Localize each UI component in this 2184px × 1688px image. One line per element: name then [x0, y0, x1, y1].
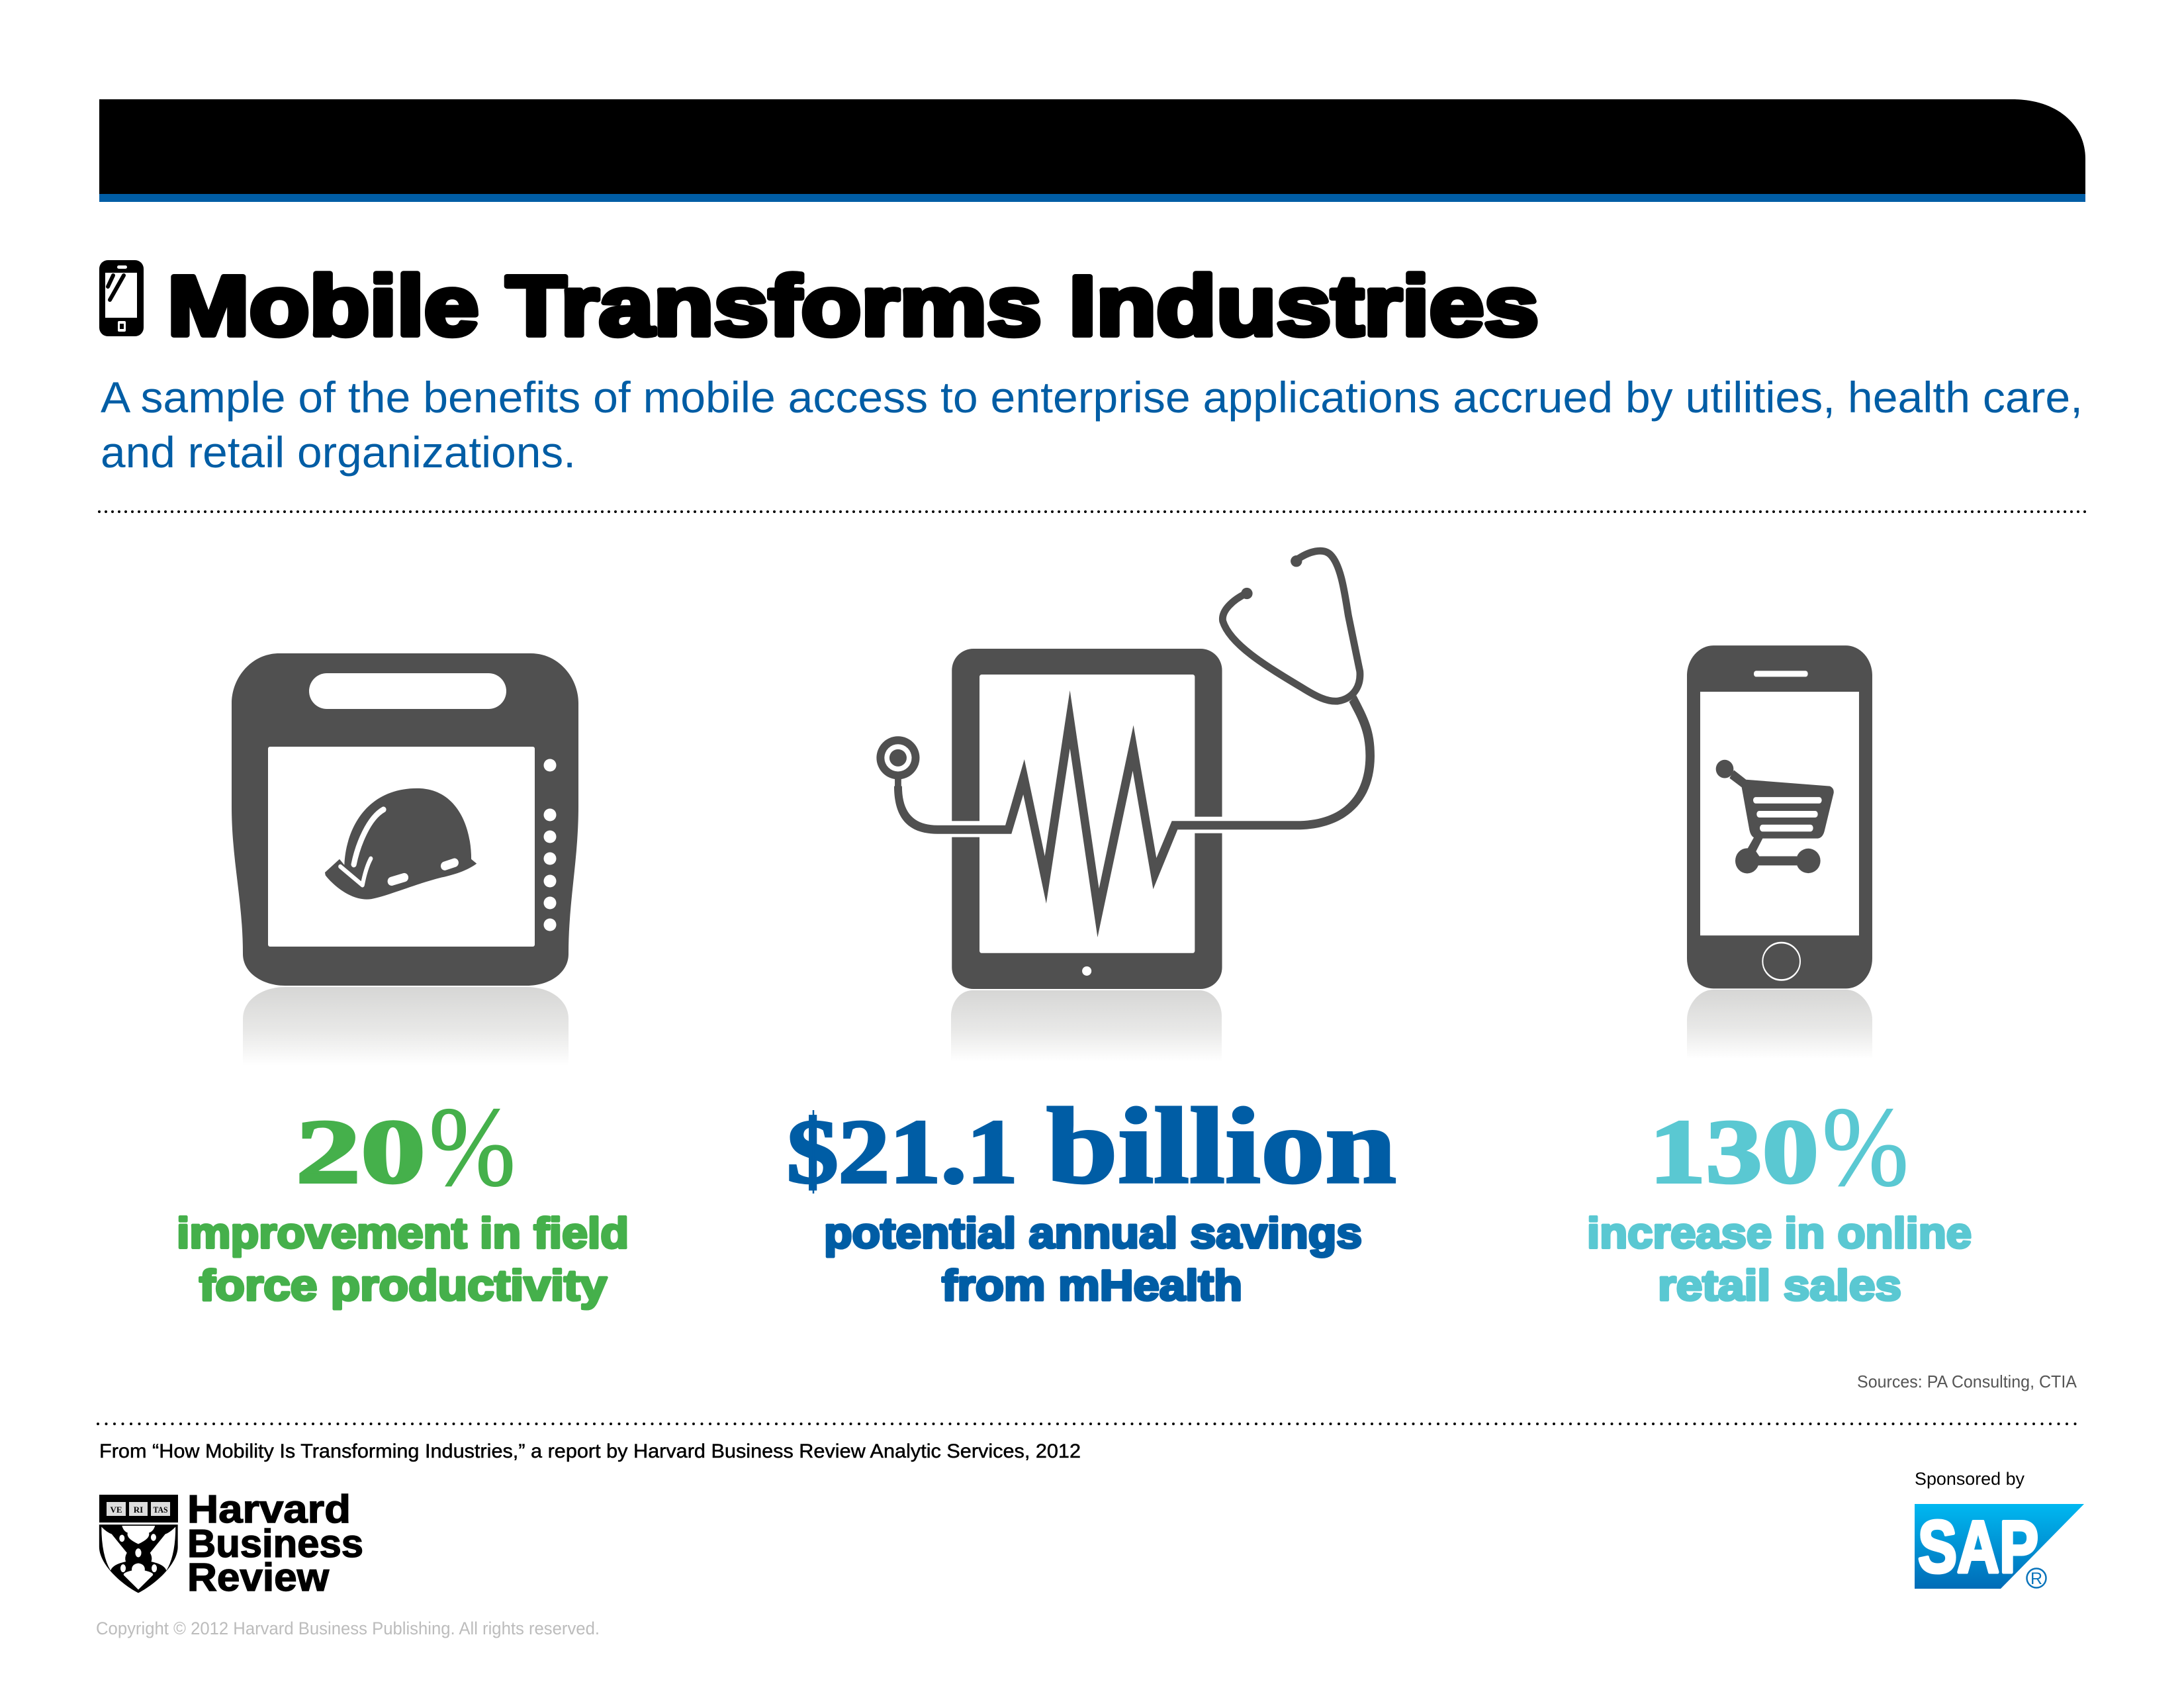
sponsor label: Sponsored by: [1915, 1469, 2025, 1489]
shield: veritas books: [99, 1495, 178, 1523]
wordmark: Business: [187, 1522, 363, 1566]
icon: small mobile phone: [99, 260, 144, 336]
subtitle: and retail organizations.: [101, 428, 576, 477]
label: field force productivity: [177, 1209, 629, 1309]
statistic: 20%: [296, 1084, 516, 1210]
wordmark: [187, 1487, 363, 1599]
statistic: 20%: 20: [296, 1101, 426, 1202]
statistic: $21.1 billion: $21.1: [787, 1101, 1018, 1202]
reflection: rugged tablet: [243, 987, 569, 1066]
icon: smartphone with shopping cart: [1687, 645, 1872, 988]
header bar: [99, 99, 2085, 202]
statistic: $21.1 billion: billion: [1046, 1086, 1396, 1206]
panel: mHealth: [787, 551, 1396, 1309]
label: online retail sales: increase in online: [1587, 1209, 1972, 1257]
panel: field force: [177, 653, 629, 1309]
statistic: 130%: [1649, 1084, 1909, 1210]
shield: veritas books: TAS: [154, 1505, 168, 1515]
shield: crest: [99, 1524, 178, 1593]
wordmark: Review: [187, 1556, 329, 1599]
sources note: Sources: PA Consulting, CTIA: [1857, 1372, 2077, 1391]
icon: rugged tablet with hard hat: [232, 653, 578, 986]
subtitle: A sample of the benefits of mobile access to enterprise applications accrued by utilities, health care,: [101, 373, 2083, 422]
report citation: From “How Mobility Is Transforming Industries,” a report by Harvard Business Review Analytic Services, 2012: [99, 1440, 1081, 1462]
label: field force productivity: force productivity: [199, 1261, 607, 1309]
logo: SAP: SAP: [1918, 1506, 2038, 1588]
statistic: 130%: %: [1822, 1084, 1909, 1210]
label: online retail sales: [1587, 1209, 1972, 1309]
reflection: smartphone: [1687, 990, 1872, 1059]
label: savings from mHealth: from mHealth: [942, 1261, 1242, 1309]
logo: Harvard Business Review: [99, 1487, 363, 1599]
label: field force productivity: improvement in field: [177, 1209, 629, 1257]
logo: SAP: R: [2030, 1570, 2042, 1588]
label: savings from mHealth: potential annual savings: [824, 1209, 1362, 1257]
icon: tablet with stethoscope: [876, 551, 1375, 989]
subtitle: [101, 373, 2083, 477]
title: Mobile Transforms Industries: [167, 259, 1539, 353]
statistic: $21.1 billion: [787, 1086, 1396, 1206]
copyright: Copyright © 2012 Harvard Business Publishing. All rights reserved.: [96, 1618, 600, 1638]
statistic: 130%: 130: [1649, 1101, 1819, 1202]
shield: veritas books: RI: [134, 1505, 143, 1515]
panel: online retail: [1587, 645, 1972, 1309]
wordmark: Harvard: [187, 1487, 351, 1531]
label: online retail sales: retail sales: [1658, 1261, 1901, 1309]
label: savings from mHealth: [824, 1209, 1362, 1309]
statistic: 20%: %: [429, 1084, 516, 1210]
reflection: medical tablet: [951, 990, 1222, 1062]
shield: veritas books: VE: [110, 1505, 122, 1515]
